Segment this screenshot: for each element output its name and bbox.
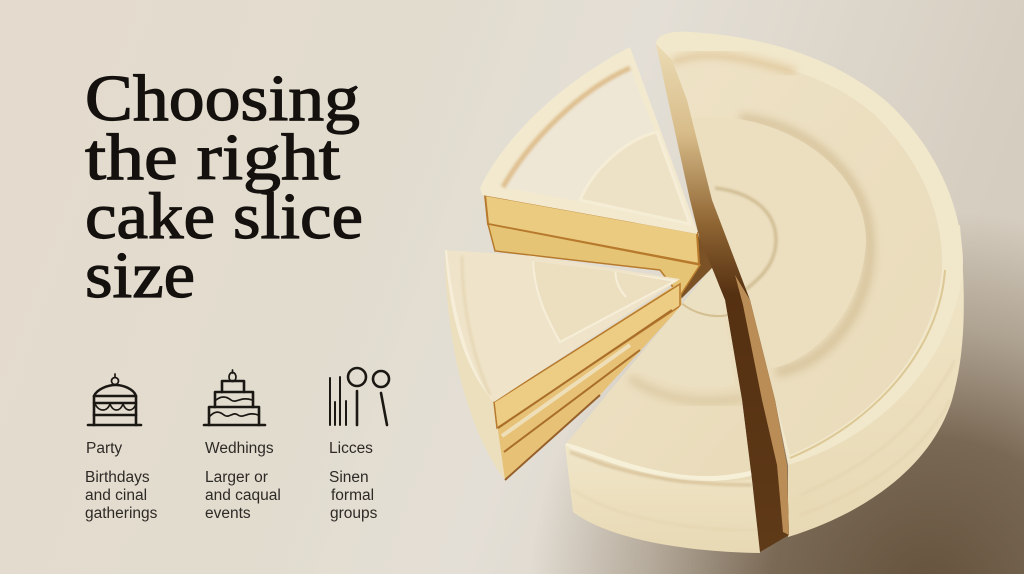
label: slices: Sinen [329,469,369,486]
title: Choosing [85,62,360,135]
label: slices: formal [331,487,374,504]
title [85,62,363,312]
label: slices: Licces [329,440,373,457]
label: weddings: events [205,505,251,522]
label: weddings [205,440,281,522]
crumb strip [735,275,789,535]
slice: left [445,250,682,480]
label: slices: groups [330,505,378,522]
label: party: gatherings [85,505,158,522]
icon: party cake [88,374,141,425]
label: party: Party [86,440,122,457]
label: weddings: Larger or [205,469,268,486]
label: party: and cinal [85,487,147,504]
cake shadow [500,200,1024,574]
icon: slices tools [330,368,389,425]
label: weddings: and caqual [205,487,281,504]
title: the right [85,121,340,194]
slice: front [565,262,760,553]
title: size [85,239,195,312]
label: party: Birthdays [85,469,150,486]
icon: wedding cake [204,370,265,425]
cut face and gap [656,44,789,552]
label: slices [329,440,378,522]
title: cake slice [85,180,363,253]
cake main piece [656,32,964,537]
slice: top left [480,47,712,300]
label: party [85,440,158,522]
label: weddings: Wedhings [205,440,274,457]
